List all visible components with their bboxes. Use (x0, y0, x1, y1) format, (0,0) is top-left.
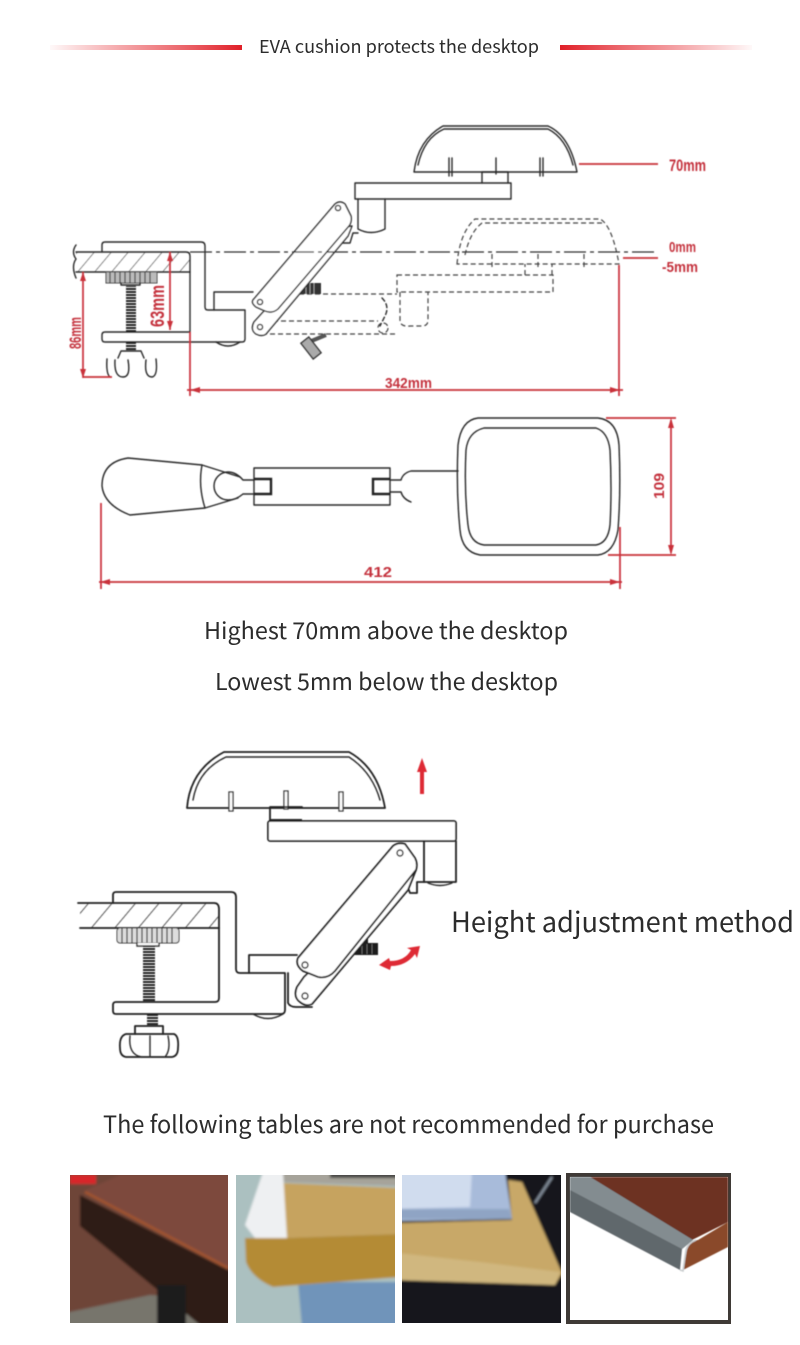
screw knob (106, 272, 157, 377)
upper pad (414, 126, 577, 183)
red dimensions: 412 (364, 564, 392, 581)
top arm and post (355, 183, 511, 232)
pad (187, 752, 385, 821)
red dimensions (99, 418, 676, 589)
photo: metal trim edge (566, 1173, 731, 1324)
desktop reference line (190, 251, 658, 253)
red up arrow (417, 758, 427, 794)
red dimensions: 342mm (385, 375, 432, 392)
heading: EVA cushion (50, 33, 752, 59)
caption: highest: Highest 70mm above the desktop (204, 612, 568, 646)
neck (390, 471, 458, 502)
clamp (113, 892, 312, 1018)
red dimensions: 70mm (669, 156, 706, 175)
red dimensions (66, 156, 706, 396)
swing arm (296, 843, 424, 1005)
red dimensions: 109 (651, 473, 668, 499)
photo: bevelled brown table (70, 1175, 228, 1323)
red curved arrow (379, 946, 420, 970)
height adjustment drawing (78, 752, 456, 1057)
heading: EVA cushion: EVA cushion protects the desktop (259, 33, 539, 59)
heading: tables not recommended: The following tables are not recommended for purchase (103, 1105, 714, 1140)
clamp body (102, 242, 253, 346)
swing arm (252, 202, 358, 359)
middle link (254, 468, 390, 505)
side-view dimension drawing (66, 126, 706, 396)
top arm and post (268, 821, 456, 886)
dashed lowered position (262, 219, 619, 334)
table section (78, 903, 219, 928)
red dimensions: 86mm (66, 317, 85, 349)
red dimensions: -5mm (662, 259, 698, 276)
screw and knobs (117, 928, 179, 1057)
label: height adjustment: Height adjustment method (451, 901, 794, 941)
table section (74, 245, 190, 278)
plan-view dimension drawing (99, 418, 676, 589)
clamp head (102, 458, 254, 515)
pad outline (457, 418, 620, 555)
photo: rounded bamboo table (236, 1175, 395, 1323)
red dimensions: 0mm (669, 239, 696, 256)
photo: chamfered light wood table (402, 1175, 561, 1323)
red dimensions: 63mm (148, 285, 169, 327)
caption: lowest: Lowest 5mm below the desktop (215, 663, 558, 697)
